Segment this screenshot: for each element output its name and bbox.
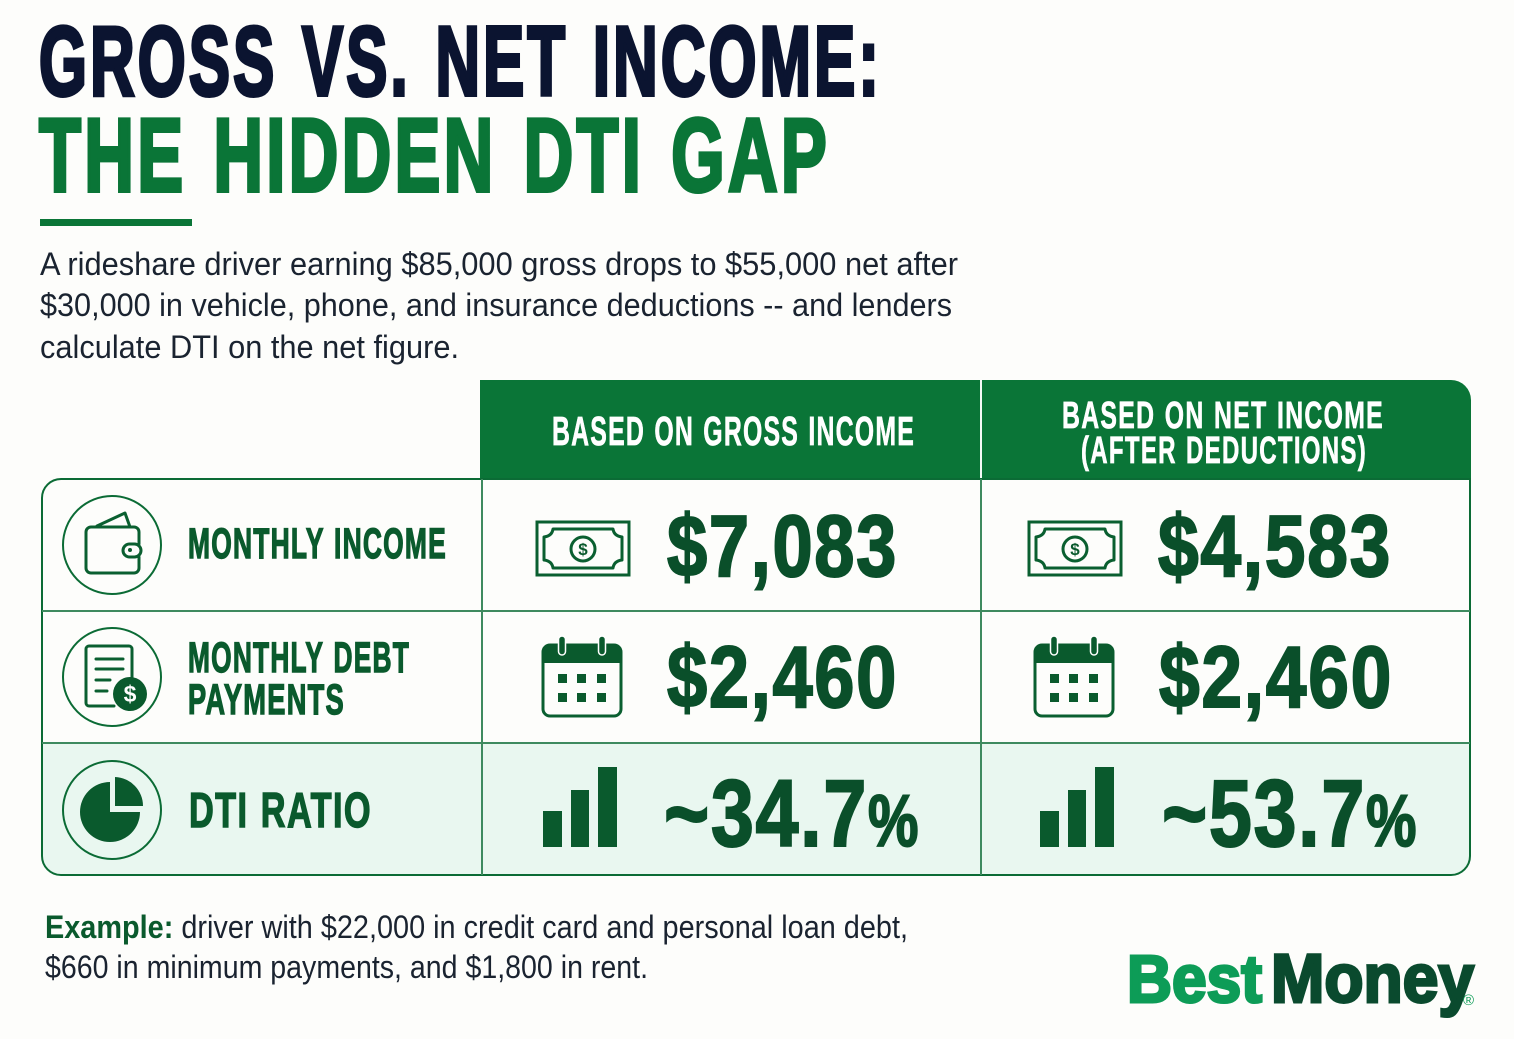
icon: banknote gross: $ [578,540,588,559]
icon: wallet [63,496,161,594]
icon: bill document: $ [124,681,137,707]
example footnote: $660 in minimum payments, and $1,800 in rent. [45,949,648,985]
icon: banknote net: $ [1070,540,1080,559]
logo: BestMoney: ® [1463,992,1474,1009]
header: net income [1062,395,1384,472]
icon: bars gross [543,767,617,847]
table body grid [42,479,1470,875]
icon: calendar gross [542,636,622,716]
label: monthly debt payments: MONTHLY DEBT [188,634,410,682]
icon: banknote net [1029,522,1121,575]
row: monthly income [63,496,1392,595]
example footnote: Example: driver with $22,000 in credit card and personal loan debt, [45,909,908,945]
title [39,6,882,214]
logo: BestMoney [1127,940,1474,1017]
value: net DTI: ~53.7 [1162,761,1366,867]
intro text [40,246,958,365]
value: gross DTI: % [868,781,920,862]
icon: banknote gross [537,522,629,575]
value: net debt payments: $2,460 [1159,629,1393,726]
icon: pie chart [63,761,161,859]
value: gross DTI: ~34.7 [664,761,868,867]
logo: BestMoney: Best [1127,942,1262,1017]
icon: bill document [63,628,161,726]
intro text: calculate DTI on the net figure. [40,329,459,365]
title accent rule [40,219,192,226]
logo: BestMoney: Money [1271,940,1474,1017]
icon: bars net [1040,767,1114,847]
intro text: A rideshare driver earning $85,000 gross drops to $55,000 net after [40,246,958,282]
value: net monthly income: $4,583 [1158,498,1392,595]
row: monthly debt payments [63,628,1393,726]
title line 1: GROSS VS. NET INCOME: [39,6,882,116]
row: DTI ratio [63,761,1418,867]
label: monthly debt payments: PAYMENTS [188,676,345,724]
value: gross debt payments: $2,460 [667,629,898,726]
label: monthly income: MONTHLY INCOME [188,520,447,568]
value: gross monthly income: $7,083 [667,498,898,595]
table header [480,380,1471,479]
icon: calendar net [1034,636,1114,716]
title line 2: THE HIDDEN DTI GAP [39,98,830,214]
label: DTI ratio: DTI RATIO [189,784,372,838]
intro text: $30,000 in vehicle, phone, and insurance deductions -- and lenders [40,287,952,323]
header: gross income: BASED ON GROSS INCOME [552,408,915,454]
example footnote [45,909,908,985]
label: monthly debt payments [188,634,410,724]
value: net DTI: % [1366,781,1418,862]
comparison table [42,380,1471,875]
